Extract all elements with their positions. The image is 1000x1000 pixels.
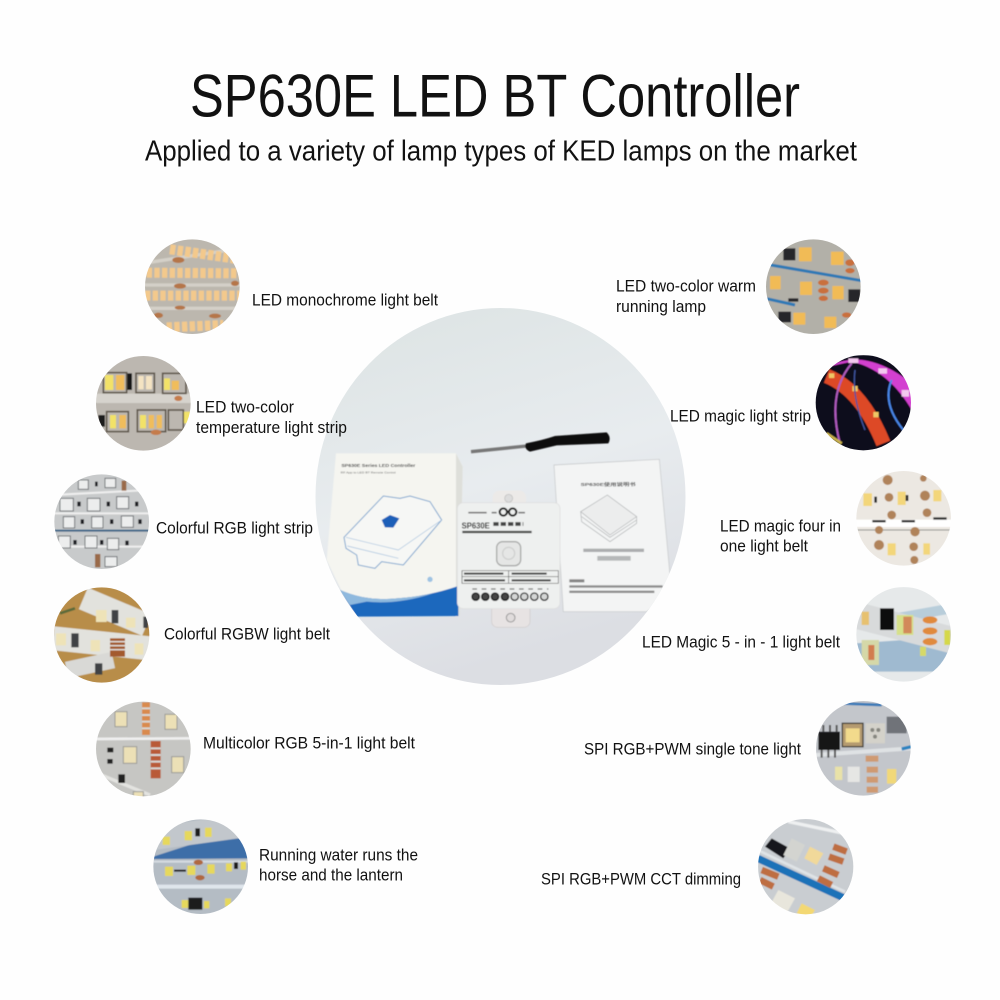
- thumbnail: magic four-in-one belt: [855, 470, 953, 568]
- left column thumbnails 1-3: [53, 238, 243, 573]
- thumbnail: SPI RGB+PWM CCT: [758, 818, 854, 918]
- title: SP630E LED BT Controller: [190, 62, 800, 130]
- left column thumbnails 4-6: [53, 587, 250, 918]
- right column thumbnails 4-6: [758, 587, 953, 918]
- thumbnail: magic light strip: [815, 355, 912, 452]
- thumbnail: running water strip: [153, 818, 250, 918]
- controller: [457, 491, 560, 627]
- thumbnail: SPI RGB+PWM single tone: [815, 700, 912, 797]
- instruction manual: [554, 459, 672, 612]
- central product photo: [316, 308, 686, 685]
- right column thumbnails 1-3: [765, 238, 953, 568]
- label: colorful RGB: Colorful RGB light strip: [156, 520, 313, 538]
- label: running water: horse and the lantern: [259, 866, 403, 884]
- label: magic four in one: LED magic four in: [720, 518, 841, 536]
- instruction manual: SP630E使用说明书: [581, 481, 637, 488]
- label: multicolor: Multicolor RGB 5-in-1 light belt: [203, 734, 415, 752]
- label: running water: Running water runs the: [259, 846, 418, 864]
- label: two-color warm: LED two-color warm: [616, 278, 756, 296]
- label: two-color temperature: LED two-color: [196, 398, 294, 416]
- controller: SP630E: [462, 521, 490, 531]
- thumbnail: two-color temperature strip: [93, 353, 193, 453]
- label: two-color temperature: temperature light strip: [196, 419, 347, 437]
- label: SPI single tone: SPI RGB+PWM single tone light: [584, 740, 801, 758]
- icon: screwdriver: [471, 432, 610, 452]
- subtitle: Applied to a variety of lamp types of KED lamps on the market: [145, 136, 857, 168]
- label: magic strip: LED magic light strip: [670, 408, 811, 426]
- label: two-color warm: running lamp: [616, 298, 706, 316]
- product box: SP630E Series LED Controller: [341, 463, 416, 468]
- thumbnail: monochrome strip: [143, 238, 243, 338]
- label: magic 5-in-1: LED Magic 5 - in - 1 light belt: [642, 634, 840, 652]
- thumbnail: RGB strip: [53, 473, 153, 573]
- product box: [327, 453, 463, 617]
- thumbnail: two-color warm running lamp: [765, 238, 862, 338]
- label: colorful RGBW: Colorful RGBW light belt: [164, 626, 330, 644]
- label: monochrome: LED monochrome light belt: [252, 292, 438, 310]
- label: magic four in one: one light belt: [720, 538, 808, 556]
- product box: RF App to LED BT Remote Control: [341, 471, 396, 475]
- label: SPI CCT: SPI RGB+PWM CCT dimming: [541, 870, 741, 888]
- thumbnail: magic 5-in-1 belt: [855, 587, 953, 683]
- thumbnail: RGBW strip: [53, 587, 153, 687]
- thumbnail: RGB 5-in-1 strip: [93, 700, 193, 800]
